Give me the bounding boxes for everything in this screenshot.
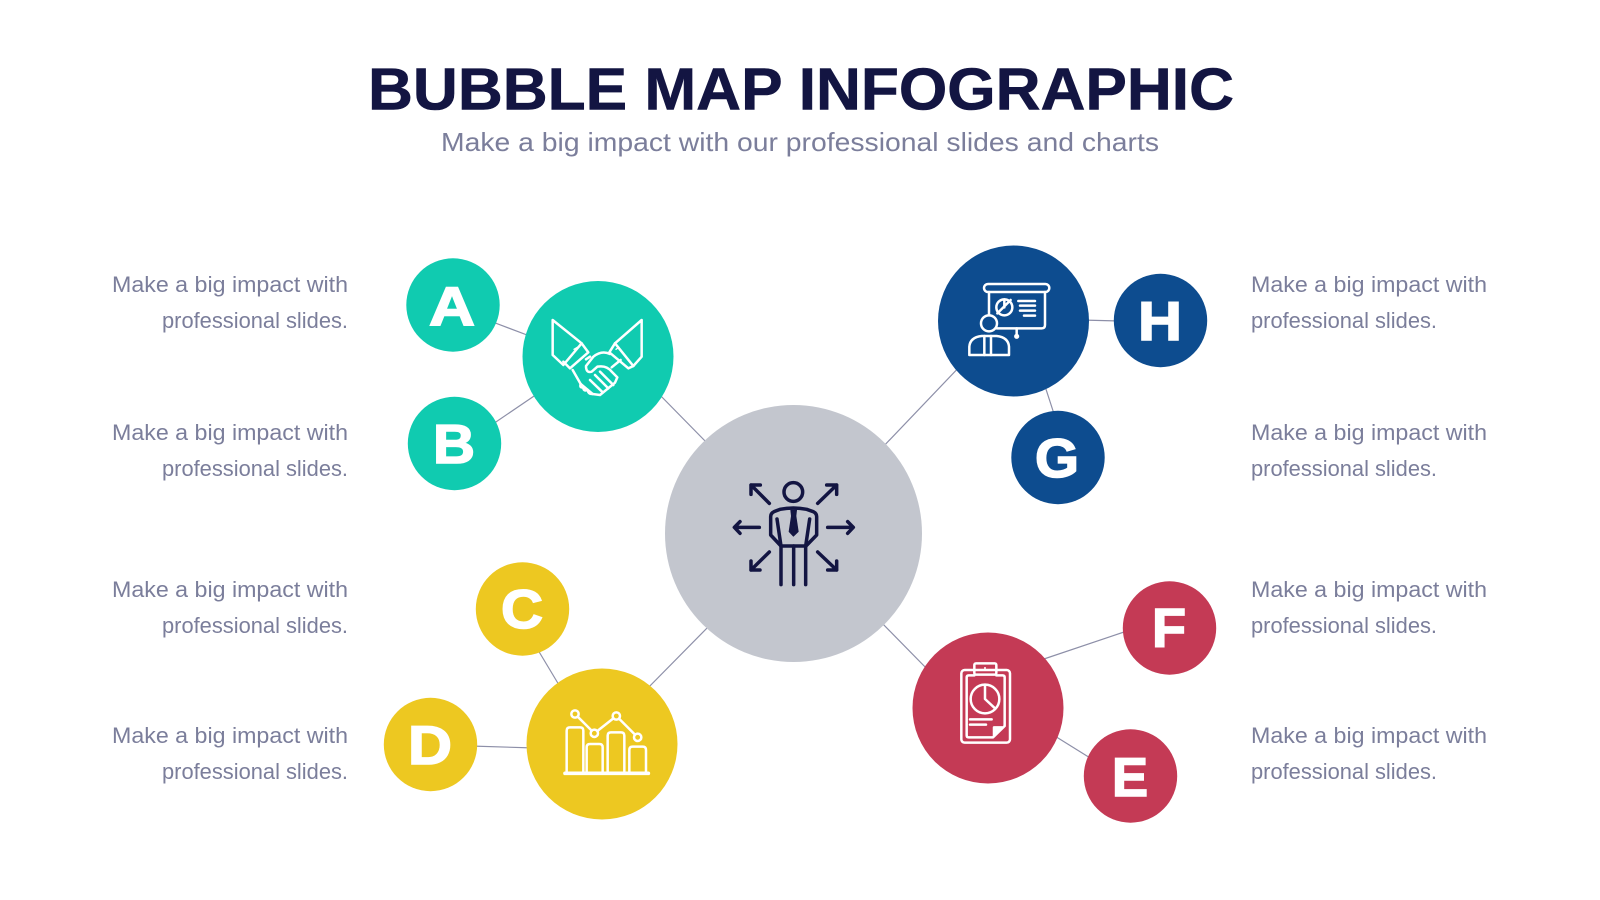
- bubble A: [406, 258, 500, 352]
- title: BUBBLE MAP INFOGRAPHIC: [368, 56, 1234, 122]
- text H: professional slides.: [1251, 308, 1437, 333]
- text F: professional slides.: [1251, 613, 1437, 638]
- icon: presenter and board: [969, 284, 1049, 355]
- bubble C: [476, 562, 569, 656]
- bubble A: A: [429, 275, 475, 337]
- bubble E: E: [1112, 746, 1148, 808]
- bubble E: [1084, 729, 1177, 823]
- text A: Make a big impact with: [112, 272, 348, 297]
- central bubble: [665, 405, 922, 662]
- bubble F: F: [1152, 597, 1186, 659]
- text C: [112, 577, 348, 638]
- bubble H: H: [1138, 290, 1182, 352]
- text D: [112, 723, 348, 784]
- text B: professional slides.: [162, 456, 348, 481]
- bubble B: [408, 397, 501, 490]
- icon: bar and line chart: [565, 710, 648, 773]
- text B: [112, 420, 348, 481]
- text B: Make a big impact with: [112, 420, 348, 445]
- text D: Make a big impact with: [112, 723, 348, 748]
- bubble: chart: [526, 668, 678, 820]
- bubble G: [1011, 411, 1105, 504]
- text G: [1251, 420, 1487, 481]
- text H: Make a big impact with: [1251, 272, 1487, 297]
- bubble: clipboard: [912, 632, 1064, 784]
- text E: Make a big impact with: [1251, 723, 1487, 748]
- text E: professional slides.: [1251, 759, 1437, 784]
- text G: professional slides.: [1251, 456, 1437, 481]
- text A: [112, 272, 348, 333]
- bubble: presentation: [938, 246, 1089, 396]
- bubble G: G: [1035, 427, 1079, 489]
- text A: professional slides.: [162, 308, 348, 333]
- subtitle: Make a big impact with our professional slides and charts: [441, 127, 1159, 157]
- text E: [1251, 723, 1487, 784]
- bubble H: [1114, 274, 1207, 367]
- bubble C: C: [501, 578, 543, 640]
- bubble D: [384, 698, 477, 791]
- text C: Make a big impact with: [112, 577, 348, 602]
- text H: [1251, 272, 1487, 333]
- bubble: handshake: [522, 281, 674, 432]
- text G: Make a big impact with: [1251, 420, 1487, 445]
- text F: Make a big impact with: [1251, 577, 1487, 602]
- icon: person with arrows: [734, 483, 853, 585]
- icon: handshake: [553, 320, 642, 395]
- text D: professional slides.: [162, 759, 348, 784]
- icon: clipboard report: [961, 663, 1010, 743]
- text F: [1251, 577, 1487, 638]
- text C: professional slides.: [162, 613, 348, 638]
- bubble F: [1123, 581, 1216, 675]
- bubble D: D: [408, 714, 452, 776]
- bubble B: B: [433, 413, 475, 475]
